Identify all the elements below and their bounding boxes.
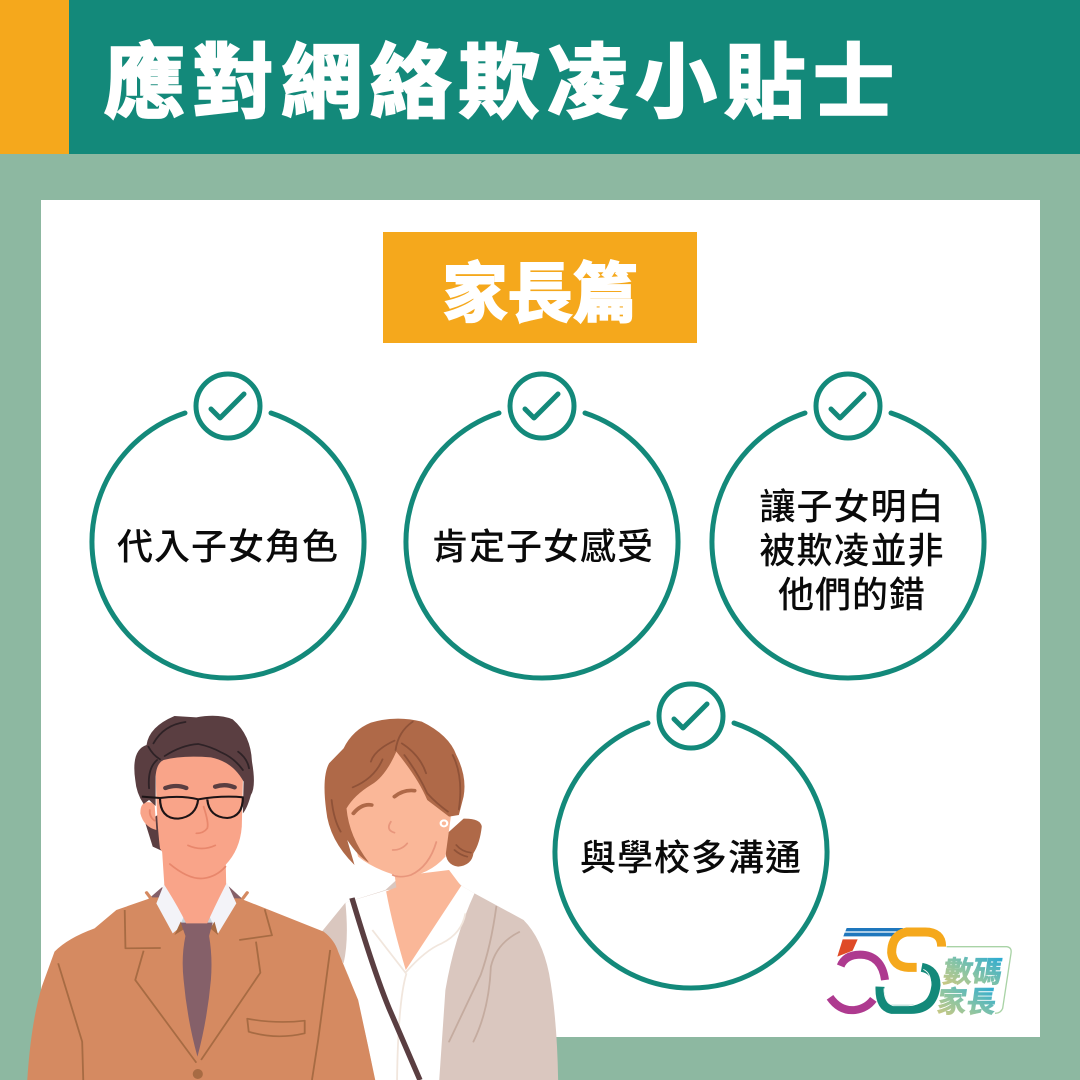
hair xyxy=(134,716,254,813)
orange curve xyxy=(892,932,942,967)
earring xyxy=(441,820,447,826)
illustration: man xyxy=(27,716,375,1080)
head back hair xyxy=(145,813,164,852)
header band xyxy=(0,0,1080,154)
blue stripes xyxy=(843,928,903,936)
tip 2 xyxy=(406,374,678,678)
jacket xyxy=(27,897,375,1080)
lapel pins xyxy=(147,893,247,898)
logo frame xyxy=(947,947,1011,1013)
hair strands xyxy=(332,722,471,857)
button xyxy=(193,1069,203,1079)
hair bun xyxy=(444,819,482,867)
red wedge xyxy=(837,939,858,957)
bag strap xyxy=(352,898,420,1080)
tie xyxy=(181,923,213,1057)
facial features xyxy=(353,790,415,813)
logo text: 數碼 xyxy=(941,956,1004,989)
panel: white content xyxy=(41,200,1040,1037)
tip 4 xyxy=(555,684,827,988)
tip 3 xyxy=(712,374,984,678)
eyebrows xyxy=(165,785,235,788)
logo text: 家長 xyxy=(935,986,998,1019)
shirt collar xyxy=(156,883,236,933)
hair strands xyxy=(148,722,249,788)
logo text xyxy=(935,956,1004,1019)
tip 4: 與學校多溝通 xyxy=(580,837,802,878)
teal curve xyxy=(880,967,936,1009)
facial features xyxy=(150,807,225,878)
title: 應對網絡欺凌小貼士 xyxy=(104,39,894,129)
tip 1: 代入子女角色 xyxy=(117,526,339,567)
logo: 55 digital parents xyxy=(830,928,1011,1019)
tip 3: 被欺凌並非 xyxy=(759,530,945,571)
illustration: woman xyxy=(322,719,558,1080)
glasses xyxy=(142,797,244,819)
back collar xyxy=(147,887,244,900)
tip 3: 讓子女明白 xyxy=(759,486,945,527)
neck xyxy=(162,847,226,923)
section heading: parents: 家長篇 xyxy=(442,257,638,330)
tip 3: 他們的錯 xyxy=(778,574,926,615)
face xyxy=(344,740,451,877)
ear xyxy=(140,802,156,830)
section heading: parents xyxy=(383,232,697,343)
magenta five xyxy=(830,955,885,1010)
cardigan and blouse xyxy=(322,870,558,1080)
hair xyxy=(325,719,464,865)
tip 1 xyxy=(92,374,364,678)
jacket seams xyxy=(58,909,330,1080)
tip 2: 肯定子女感受 xyxy=(432,526,654,567)
face xyxy=(156,750,244,878)
